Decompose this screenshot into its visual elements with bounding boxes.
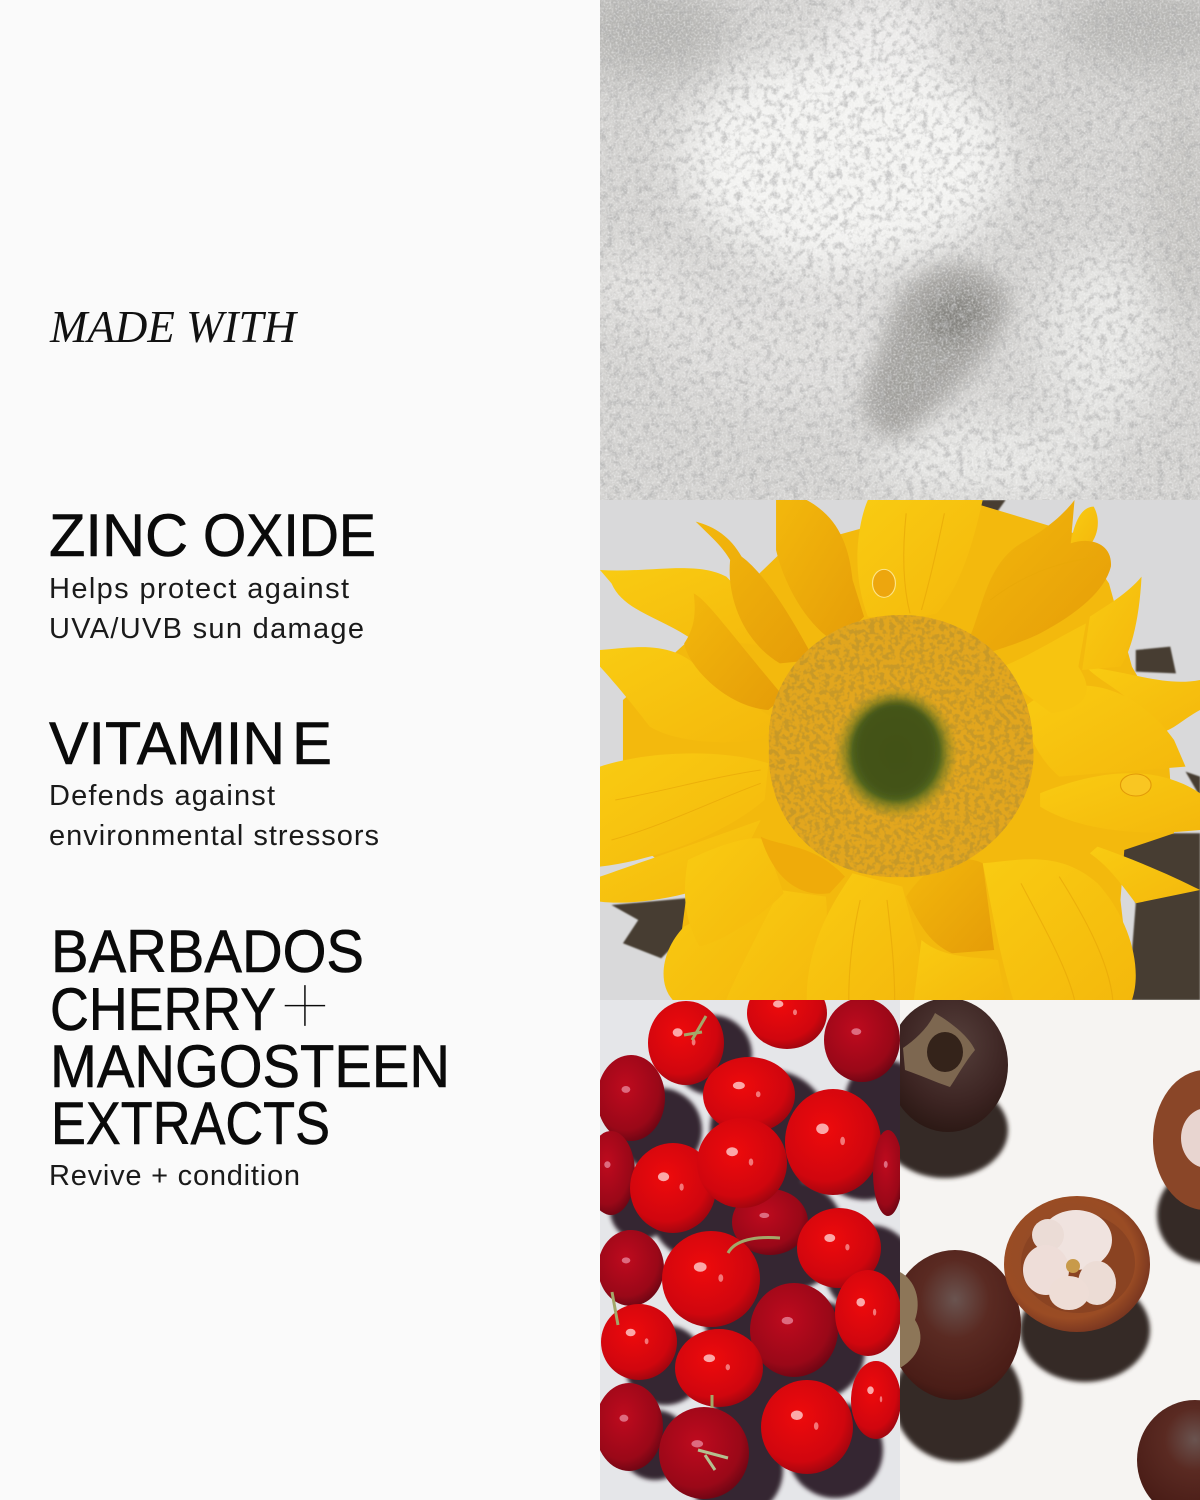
- petal veins: [611, 513, 1113, 1000]
- flower drawn in a 1568x1500 working grid: [600, 500, 1200, 1000]
- open mangosteen with fruit: [1004, 1196, 1150, 1332]
- heading: zinc oxide: ZINC: [49, 502, 188, 569]
- description: zinc oxide: Helps protect against: [49, 573, 349, 605]
- description: zinc oxide: [49, 573, 364, 645]
- mangosteen shadows: [882, 1082, 1200, 1462]
- description: zinc oxide: UVA/UVB sun damage: [49, 613, 364, 645]
- half mangosteen right: [1153, 1070, 1200, 1210]
- ingredient: zinc oxide: [49, 502, 376, 645]
- flower base silhouette: [623, 500, 1174, 1000]
- ingredient: vitamin e: [49, 710, 379, 852]
- seed disk: [768, 615, 1034, 878]
- heading: zinc oxide: [49, 502, 376, 569]
- flower shadows: [611, 500, 1200, 1000]
- photo: sunflower: [600, 500, 1200, 1000]
- text column: [49, 301, 450, 1192]
- back petals: [600, 500, 1200, 1000]
- whole mangosteen top: [900, 1000, 1008, 1132]
- heading: barbados cherry + mangosteen extracts: MANGOSTEEN: [50, 1033, 450, 1100]
- water drop: [872, 569, 895, 597]
- front folded petals: [684, 500, 1111, 953]
- photo: barbados cherries: [600, 1000, 900, 1500]
- stems: [612, 1016, 780, 1470]
- cherry shadows: [610, 1015, 925, 1500]
- heading: barbados cherry + mangosteen extracts: CHERRY: [50, 976, 276, 1043]
- description: vitamin e: Defends against: [49, 780, 275, 812]
- whole mangosteen corner: [1137, 1400, 1200, 1500]
- heading: zinc oxide: OXIDE: [203, 502, 376, 569]
- section label: made with: MADE WITH: [49, 301, 299, 352]
- heading: vitamin e: VITAMIN: [49, 710, 285, 777]
- whole mangosteen bottom: [889, 1250, 1021, 1400]
- description: barbados cherry and mangosteen: Revive + condition: [49, 1160, 300, 1192]
- description: vitamin e: environmental stressors: [49, 820, 379, 852]
- heading: vitamin e: E: [292, 710, 332, 777]
- heading: barbados cherry + mangosteen extracts: BARBADOS: [51, 918, 364, 985]
- heading: barbados cherry + mangosteen extracts: +: [278, 952, 332, 1057]
- heading: barbados cherry + mangosteen extracts: EXTRACTS: [51, 1090, 330, 1157]
- description: vitamin e: [49, 780, 379, 852]
- heading: barbados cherry + mangosteen extracts: [50, 918, 450, 1157]
- photo: mangosteen: [882, 998, 1200, 1500]
- photo: zinc oxide powder: [570, 0, 1200, 500]
- cherries: [587, 977, 903, 1499]
- ingredient: barbados cherry and mangosteen: [49, 918, 450, 1192]
